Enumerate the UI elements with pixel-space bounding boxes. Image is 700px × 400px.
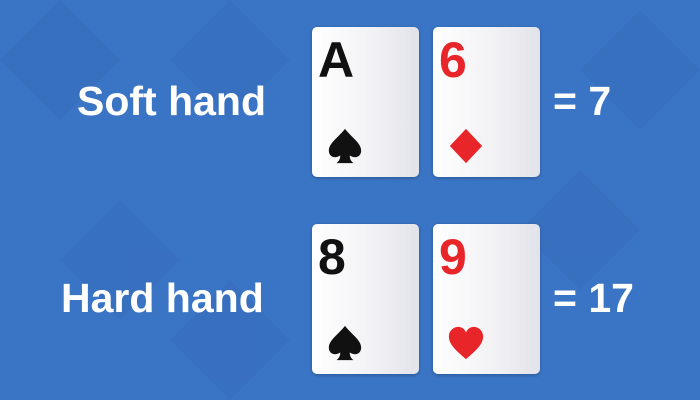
result: = 7: = 7 (553, 78, 611, 124)
rank 9: 9 (439, 229, 467, 285)
rank 6: 6 (439, 32, 467, 88)
rank 8: 8 (318, 229, 346, 285)
label: hard hand: Hard hand (61, 275, 264, 321)
icon: spade (328, 326, 362, 360)
icon: spade (328, 129, 362, 164)
card: eight of spades (312, 224, 419, 374)
icon: heart (448, 326, 484, 360)
icon: diamond (450, 129, 482, 163)
card: nine of hearts (433, 224, 540, 374)
label: soft hand: Soft hand (77, 78, 266, 124)
card: six of diamonds (433, 27, 540, 177)
rank A: A (318, 32, 354, 88)
card: ace of spades (312, 27, 419, 177)
result: = 17: = 17 (553, 275, 634, 321)
